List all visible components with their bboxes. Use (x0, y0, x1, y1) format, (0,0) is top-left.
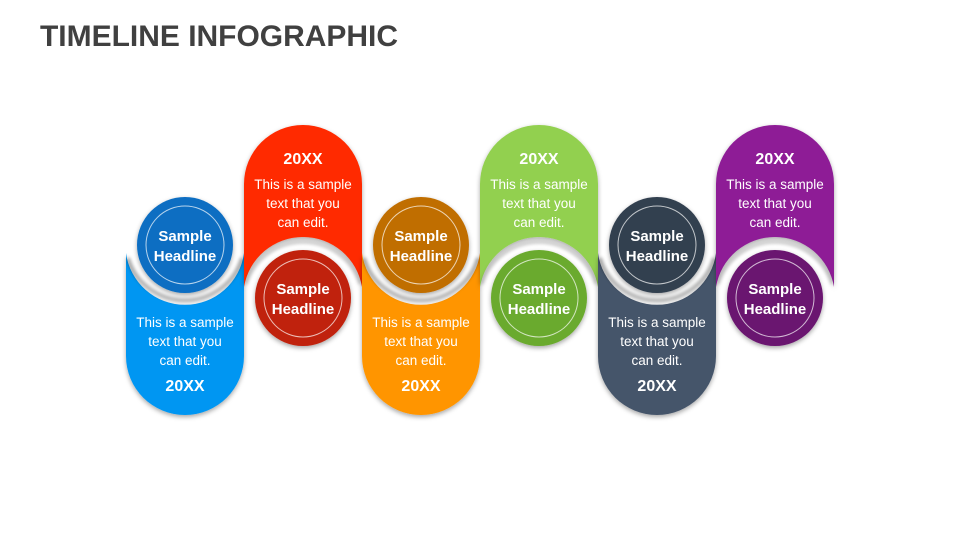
panel: step 4 green: can edit. (513, 215, 565, 230)
panel: step 1 blue: Sample (158, 228, 212, 245)
panel: step 3 orange: Headline (390, 248, 452, 265)
panel: step 3 orange: Sample (394, 228, 448, 245)
panel: step 2 red: 20XX (283, 151, 323, 168)
panel: step 6 purple: 20XX (755, 151, 795, 168)
panel: step 2 red: Sample (276, 281, 330, 298)
panel: step 5 slate: Sample (630, 228, 684, 245)
panel: step 4 green: Headline (508, 301, 570, 318)
panel: step 3 orange: can edit. (395, 353, 447, 368)
panel: step 1 blue: 20XX (165, 378, 205, 395)
panel: step 5 slate: This is a sample (608, 315, 706, 330)
panel: step 2 red: Headline (272, 301, 334, 318)
panel: step 1 blue: This is a sample (136, 315, 234, 330)
panel: step 4 green: text that you (502, 196, 576, 211)
panel: step 4 green: 20XX (519, 151, 559, 168)
panel: step 5 slate: text that you (620, 334, 694, 349)
panel: step 2 red (244, 125, 362, 346)
panel: step 5 slate: 20XX (637, 378, 677, 395)
panel: step 2 red: can edit. (277, 215, 329, 230)
panel: step 1 blue: can edit. (159, 353, 211, 368)
panel: step 4 green (480, 125, 598, 346)
panel: step 3 orange: text that you (384, 334, 458, 349)
panel: step 6 purple: This is a sample (726, 177, 824, 192)
panel: step 6 purple: Headline (744, 301, 806, 318)
panel: step 2 red: text that you (266, 196, 340, 211)
panel: step 1 blue (126, 197, 244, 415)
panel: step 4 green: This is a sample (490, 177, 588, 192)
panel: step 5 slate: Headline (626, 248, 688, 265)
panel: step 3 orange: 20XX (401, 378, 441, 395)
panel: step 1 blue: Headline (154, 248, 216, 265)
panel: step 6 purple: Sample (748, 281, 802, 298)
panel: step 6 purple: can edit. (749, 215, 801, 230)
panel: step 6 purple: text that you (738, 196, 812, 211)
panel: step 3 orange: This is a sample (372, 315, 470, 330)
panel: step 4 green: Sample (512, 281, 566, 298)
panel: step 5 slate: can edit. (631, 353, 683, 368)
panel: step 5 slate (598, 197, 716, 415)
panel: step 3 orange (362, 197, 480, 415)
title: TIMELINE INFOGRAPHIC (40, 20, 398, 53)
panel: step 6 purple (716, 125, 834, 346)
panel: step 2 red: This is a sample (254, 177, 352, 192)
panel: step 1 blue: text that you (148, 334, 222, 349)
